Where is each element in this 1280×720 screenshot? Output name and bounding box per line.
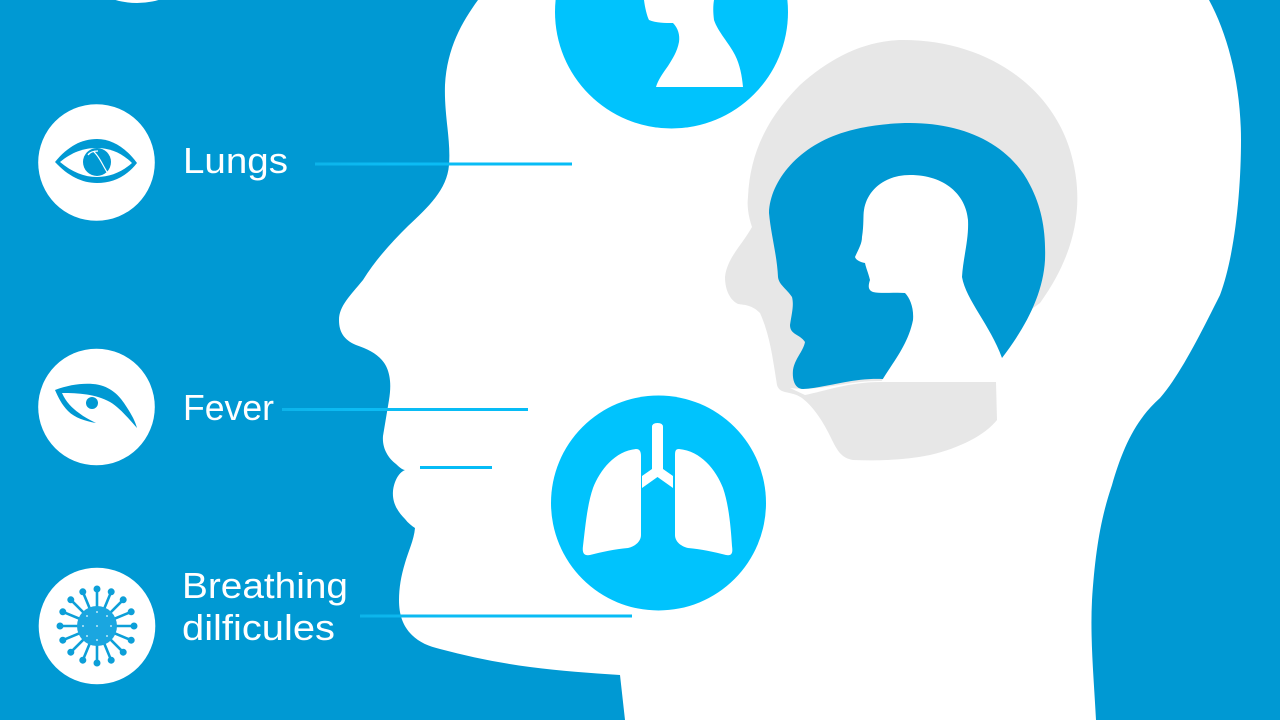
label: Lungs: Lungs xyxy=(183,140,288,181)
label: Breathing difficulties xyxy=(182,565,348,648)
label: Fever: Fever xyxy=(183,387,274,428)
blue inner head xyxy=(769,123,1045,389)
connector line: lungs xyxy=(315,162,572,166)
icon: eye xyxy=(38,104,155,221)
large head silhouette xyxy=(339,0,1241,720)
icon: fever eye xyxy=(38,349,155,465)
white person silhouette xyxy=(855,175,1002,382)
connector line: fever xyxy=(282,408,528,411)
grey head shadow xyxy=(725,40,1077,460)
icon: virus xyxy=(39,568,155,684)
cyan circle: lungs icon xyxy=(551,396,766,610)
white gap under blue head xyxy=(790,300,1045,400)
icon: lungs xyxy=(583,423,732,555)
cyan circle: top person xyxy=(555,0,788,128)
label: Breathing difficulties: dilficules xyxy=(182,607,335,648)
label: Breathing difficulties: Breathing xyxy=(182,565,348,606)
connector line: breathing xyxy=(360,614,632,618)
connector line: short xyxy=(420,466,492,469)
top partial icon circle xyxy=(59,0,215,3)
